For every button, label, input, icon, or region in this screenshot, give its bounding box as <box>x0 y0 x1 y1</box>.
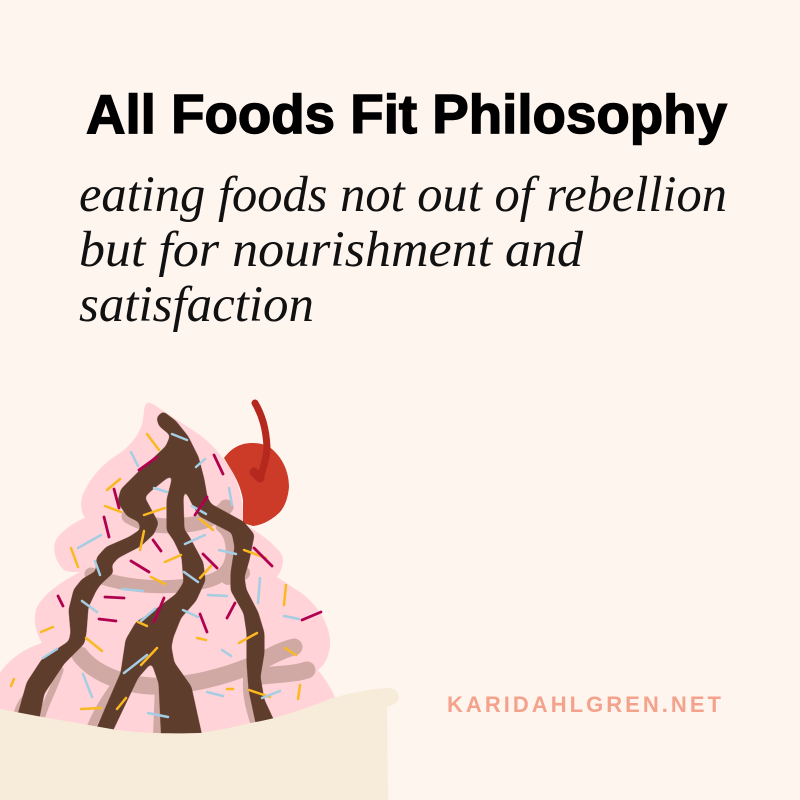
cherry stem tip <box>254 472 260 478</box>
pink soft-serve swirl <box>0 403 336 740</box>
sundae cup <box>0 688 399 800</box>
subtitle text block <box>79 167 727 333</box>
chocolate left stream <box>17 413 203 728</box>
chocolate drizzle <box>17 413 277 746</box>
cherry <box>224 443 289 526</box>
subtitle text block: eating foods not out of rebellion <box>79 167 727 223</box>
sprinkles: magenta <box>58 455 321 632</box>
sprinkles: blue <box>43 434 299 717</box>
illustration: ice cream sundae <box>0 403 399 800</box>
icing shadow bands <box>17 507 307 735</box>
sprinkles: yellow <box>11 434 300 709</box>
subtitle text block: but for nourishment and <box>79 222 584 278</box>
website credit: KARIDAHLGREN.NET <box>447 692 722 717</box>
subtitle text block: satisfaction <box>79 277 314 333</box>
cherry stem <box>255 403 267 475</box>
title: All Foods Fit Philosophy <box>86 83 727 145</box>
chocolate right stream <box>183 457 277 732</box>
chocolate middle stream <box>92 472 204 746</box>
